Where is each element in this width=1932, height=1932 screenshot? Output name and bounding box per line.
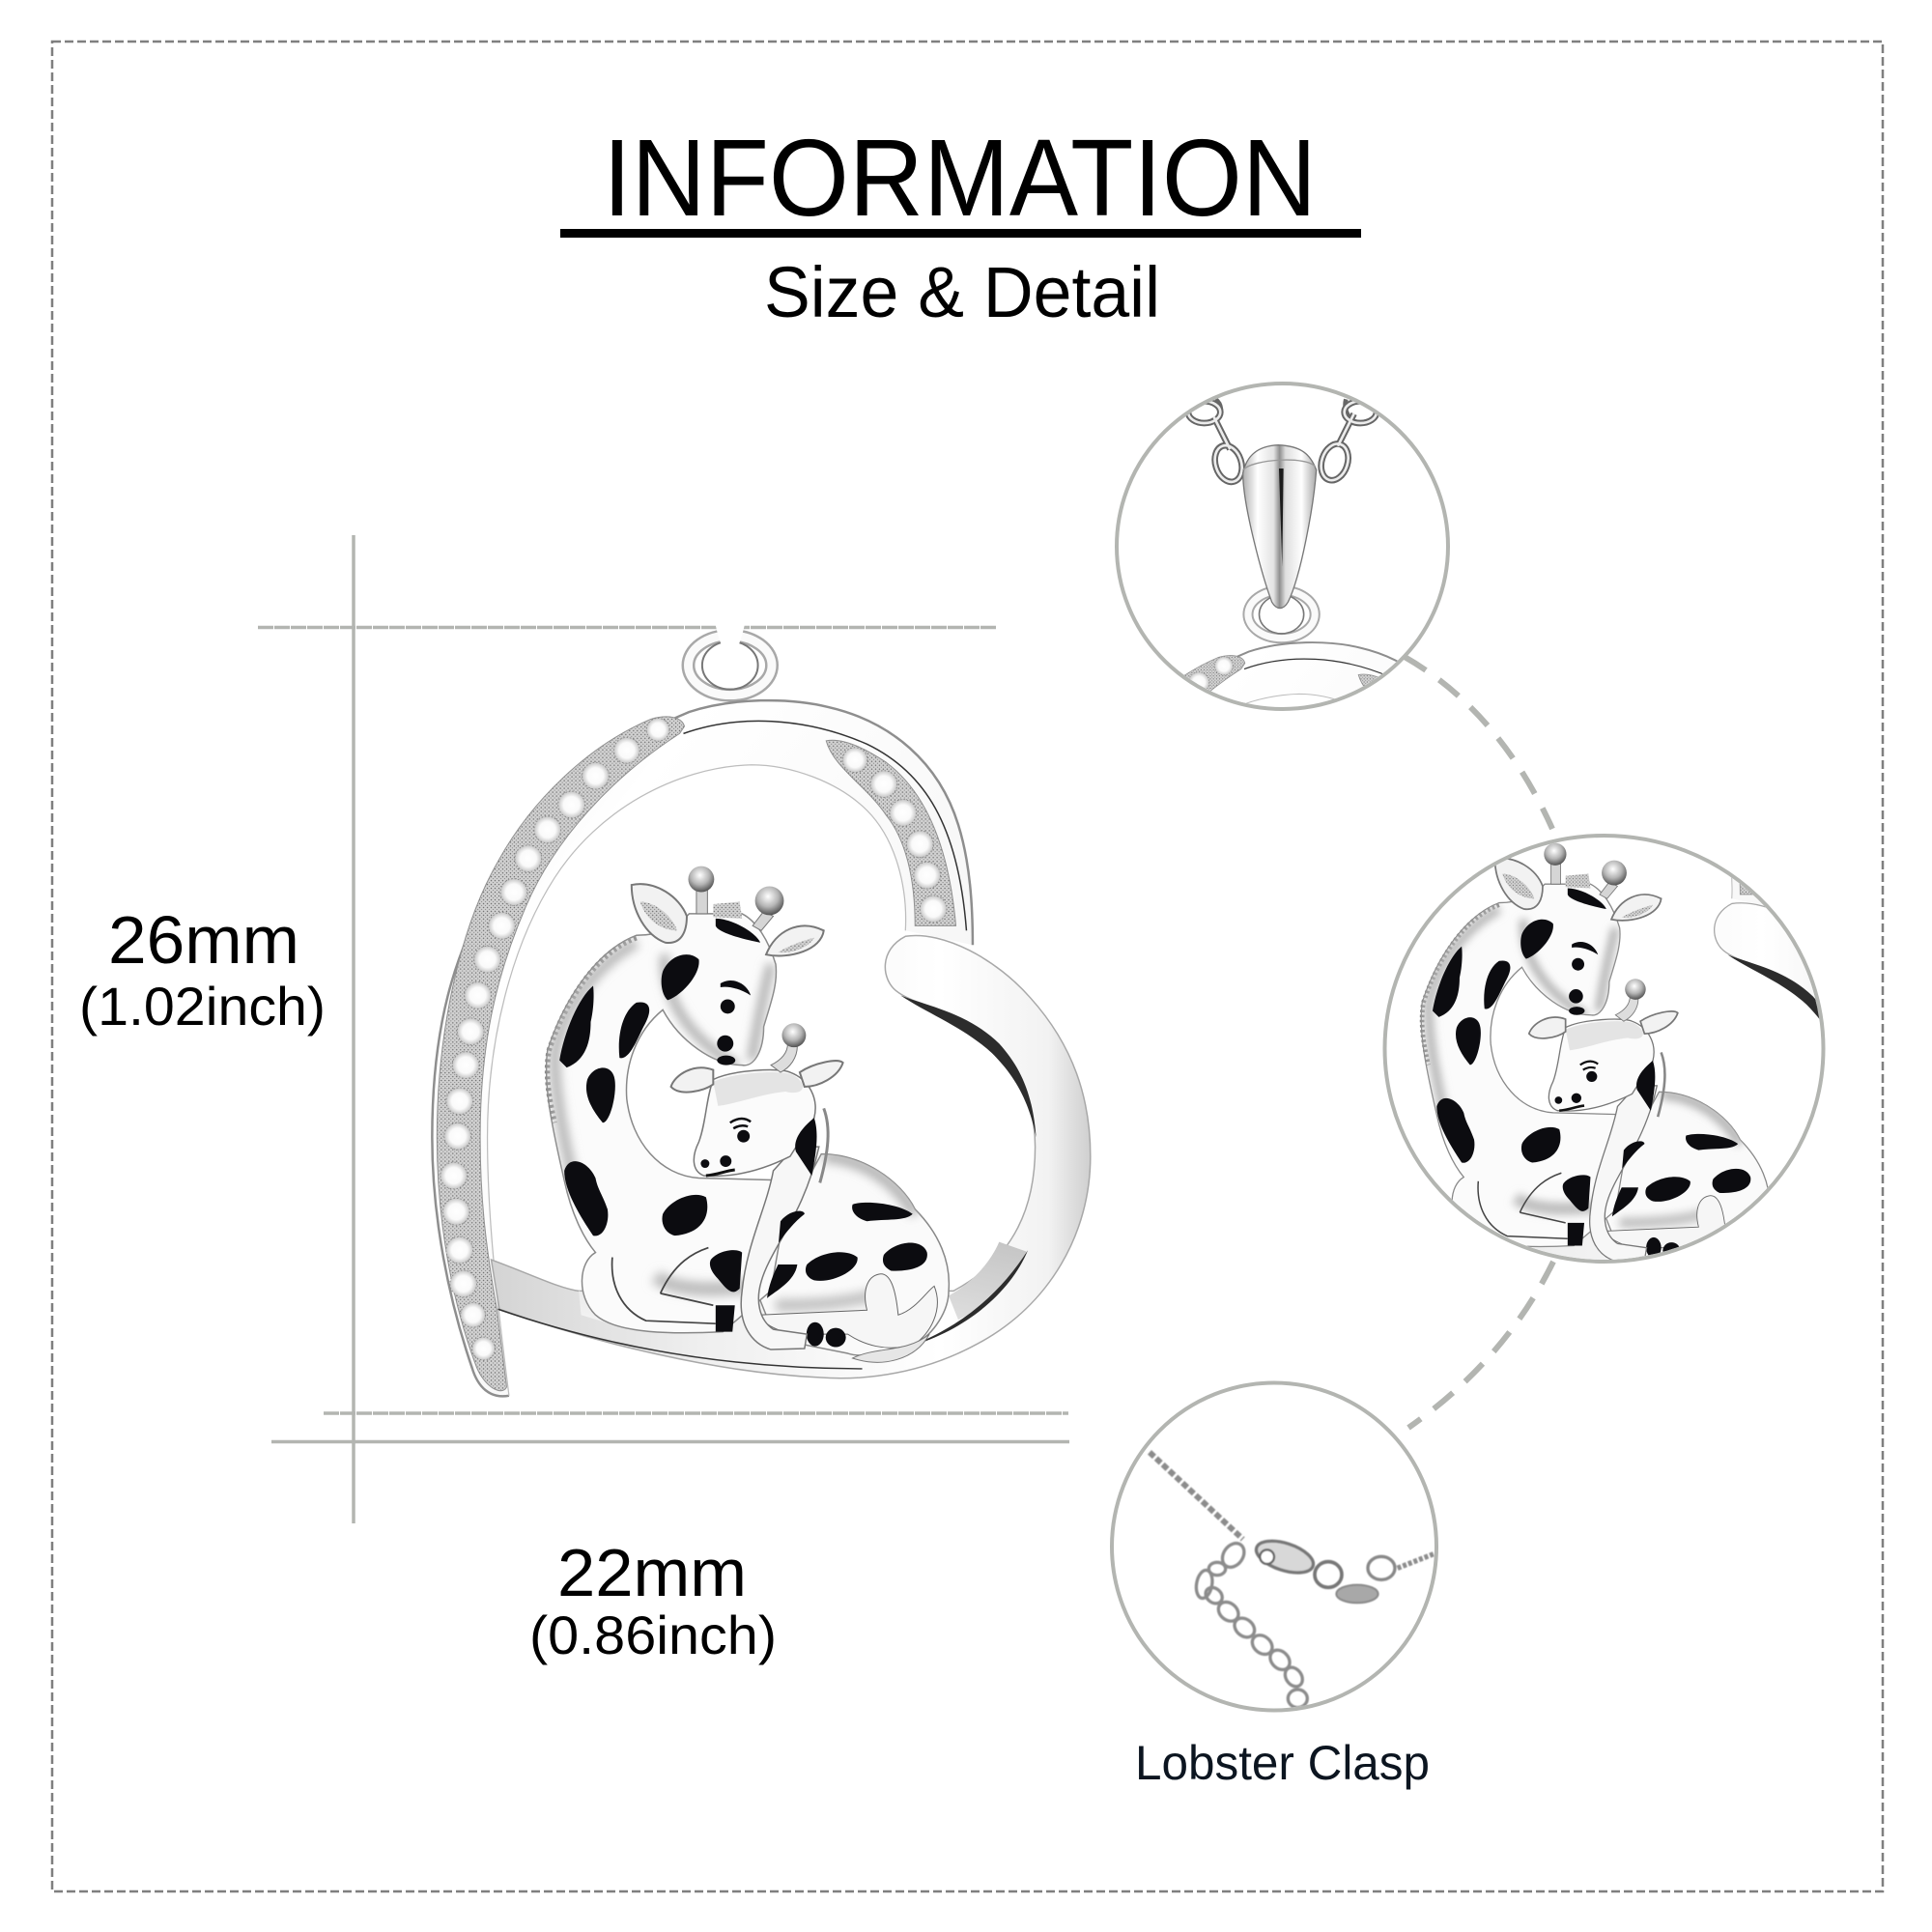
label: width in mm: 22mm <box>557 1535 747 1610</box>
title underline <box>560 229 1361 238</box>
inset circle: giraffes close-up <box>1383 834 1826 1264</box>
dashed connector: middle inset to bottom inset <box>1408 1262 1553 1428</box>
big giraffe spots <box>559 919 760 1332</box>
label: height in mm: 26mm <box>108 902 299 978</box>
heart outer rim <box>432 700 973 1396</box>
pave band right <box>826 740 956 925</box>
heart inner contour <box>488 765 906 1396</box>
subtitle: Size & Detail: Size & Detail <box>764 252 1160 332</box>
dimension guide lines <box>258 535 1069 1523</box>
label: width in inches: (0.86inch) <box>529 1605 777 1665</box>
heart lobe and lower band <box>492 936 1091 1378</box>
baby giraffe ears <box>671 1067 713 1093</box>
extender chain <box>1194 1539 1307 1708</box>
title: INFORMATION: INFORMATION <box>603 117 1317 239</box>
label: height in inches: (1.02inch) <box>79 976 326 1037</box>
baby giraffe horn <box>771 1043 797 1072</box>
clasp <box>1254 1539 1316 1575</box>
chain left <box>1150 1452 1243 1539</box>
inset circle: bail and chain <box>1115 382 1450 711</box>
heart band <box>432 700 973 1396</box>
rings <box>1315 1562 1342 1587</box>
pendant: heart with giraffes <box>432 625 1091 1396</box>
chain links dark <box>1188 399 1377 485</box>
baby giraffe body <box>756 1154 949 1362</box>
heart detail reused <box>1184 587 1398 703</box>
polished thin lines <box>498 721 966 1369</box>
big giraffe ears <box>632 884 687 943</box>
pave band left <box>437 717 684 1391</box>
bail <box>1243 445 1317 609</box>
dashed connector: top inset to middle inset <box>1405 657 1552 829</box>
giraffes reused <box>1420 842 1820 1260</box>
jump ring <box>688 625 772 696</box>
chain links light <box>1188 401 1377 485</box>
polished shadow wedges <box>579 1242 1027 1330</box>
baby giraffe head and neck <box>671 1023 843 1350</box>
chain right <box>1398 1553 1435 1568</box>
big giraffe horns <box>696 888 774 930</box>
inset circle: lobster clasp <box>1112 1383 1436 1710</box>
big giraffe leg lines <box>612 1248 716 1323</box>
label: Lobster Clasp: Lobster Clasp <box>1135 1736 1430 1790</box>
big giraffe <box>547 867 824 1333</box>
mane edge <box>548 938 637 1122</box>
polished dark contour lines <box>900 995 1037 1347</box>
